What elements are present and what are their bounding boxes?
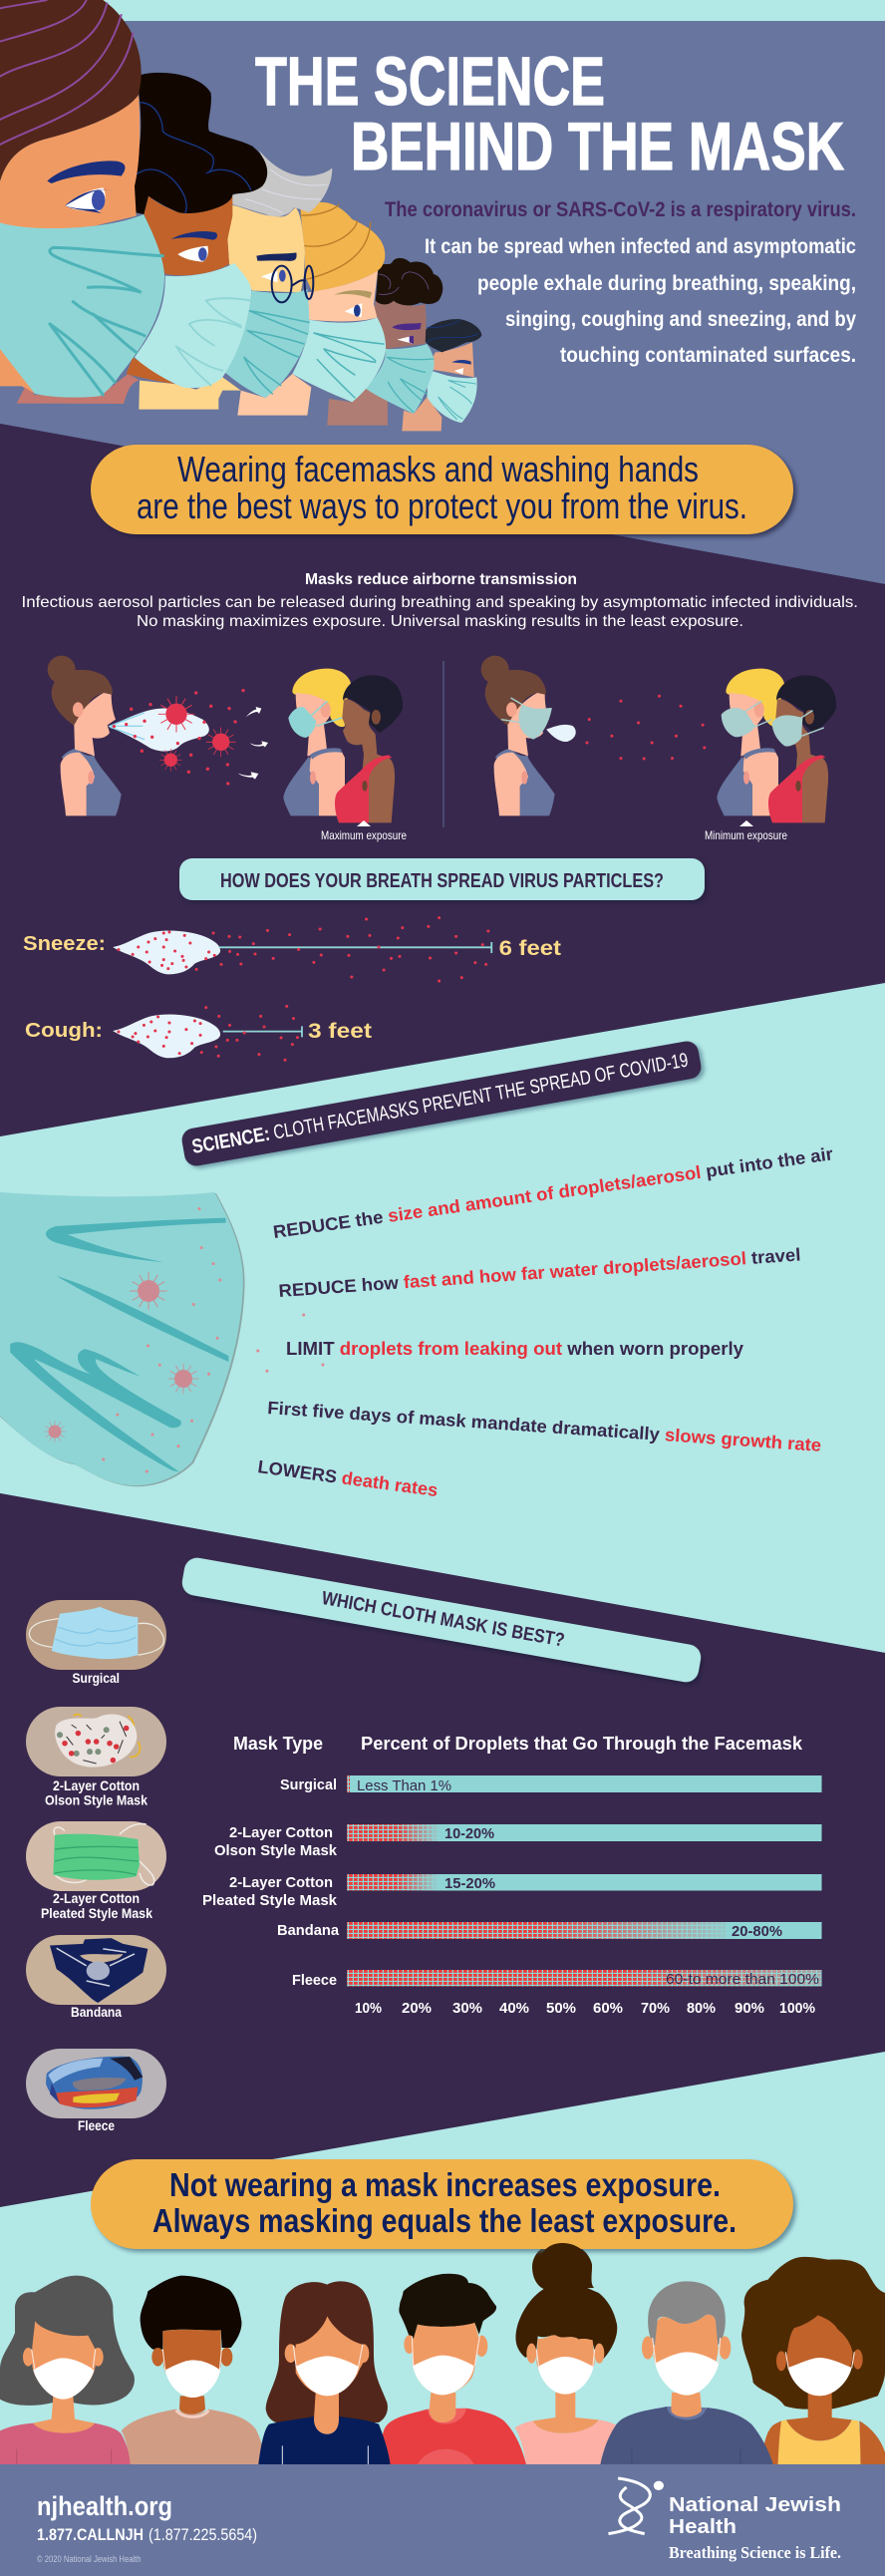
footer contact details: njhealth.org <box>37 2491 172 2521</box>
axis labels: 40% <box>499 2000 529 2017</box>
photo: fleece: Fleece <box>78 2117 115 2133</box>
person: hair bun, peach shirt <box>515 2241 617 2464</box>
person 1 <box>0 0 164 398</box>
heading: which cloth mask is best: WHICH CLOTH MASK IS BEST? <box>320 1588 566 1652</box>
bar chart: droplets through facemask <box>202 1775 821 2017</box>
chart: cough spread: 3 feet <box>308 1020 372 1043</box>
row: fleece: 60-to more than 100% <box>666 1971 819 1988</box>
photo: olson style mask: 2-Layer Cotton <box>53 1777 140 1793</box>
reduce size and amount: REDUCE the size and amount of droplets/aerosol put into the air <box>272 1143 834 1242</box>
title <box>255 43 844 184</box>
footer contact details <box>37 2491 257 2564</box>
heading: science cloth facemasks prevent the spread <box>180 1040 703 1167</box>
masks <box>518 705 802 747</box>
illustration: large mask close-up <box>0 1192 323 1486</box>
divider between scenes <box>442 661 444 827</box>
panel: dark section on which mask is best <box>0 1493 885 2207</box>
person 3 <box>222 151 332 398</box>
person 6 <box>422 319 481 423</box>
row: pleated <box>202 1874 821 1909</box>
callout: wearing facemasks pill: Wearing facemasks and washing hands <box>177 449 699 489</box>
mask viruses <box>44 1272 198 1443</box>
person: long brown hair, navy shirt <box>258 2281 391 2464</box>
photo: pleated style mask: Pleated Style Mask <box>41 1905 152 1921</box>
chart: cough spread <box>25 1006 372 1060</box>
panel: teal section on cloth facemask science <box>0 983 885 1653</box>
limit droplets: LIMIT droplets from leaking out when worn properly <box>286 1339 743 1359</box>
label: maximum exposure: Maximum exposure <box>321 828 407 842</box>
photo: pleated style mask: 2-Layer Cotton <box>53 1890 140 1906</box>
first five days: First five days of mask mandate dramatically slows growth rate <box>267 1398 822 1455</box>
photo: olson style mask <box>26 1707 166 1808</box>
photo: surgical mask: Surgical <box>72 1670 120 1686</box>
label: maximum exposure <box>321 820 407 842</box>
row: fleece <box>292 1970 821 1989</box>
logo: National Jewish Health: Health <box>669 2516 737 2538</box>
callout: wearing facemasks pill: are the best ways to protect you from the virus. <box>137 485 747 526</box>
photo: surgical mask <box>26 1600 166 1686</box>
callout: not wearing a mask pill <box>91 2159 793 2249</box>
logo: National Jewish Health: Breathing Science is Life. <box>669 2543 841 2562</box>
callout: wearing facemasks pill <box>91 445 793 534</box>
person: grey-haired man, blue sweater <box>600 2281 773 2464</box>
row: pleated: 2-Layer Cotton <box>229 1874 333 1891</box>
necks and shoulders <box>0 346 442 431</box>
illustration: minimum exposure scene, everyone masked <box>481 656 836 822</box>
virus particles <box>158 696 235 772</box>
text block: masks reduce airborne transmission: No masking maximizes exposure. Universal masking results in the least exposure. <box>137 613 743 630</box>
axis labels <box>355 2000 815 2017</box>
illustration: maximum exposure scene, no masks <box>48 656 403 822</box>
panel: dark section with exposure and breath content <box>0 424 885 1136</box>
lowers death rates: LOWERS death rates <box>256 1456 440 1500</box>
text block: masks reduce airborne transmission: Infectious aerosol particles can be released during breathing and speaking by asymptomatic infected individuals. <box>22 594 858 611</box>
row: bandana <box>277 1922 821 1940</box>
row: surgical <box>280 1775 821 1794</box>
row: surgical: Less Than 1% <box>357 1777 451 1794</box>
footer contact details: 1.877.CALLNJH <box>37 2525 144 2544</box>
list: ways cloth facemasks help <box>256 1143 834 1500</box>
heading: how does your breath spread virus particles: HOW DOES YOUR BREATH SPREAD VIRUS PARTICLES? <box>220 870 664 892</box>
glasses <box>272 266 313 302</box>
person: curly brown hair, yellow top <box>741 2257 885 2464</box>
photo: olson style mask: Olson Style Mask <box>45 1792 148 1808</box>
person: black afro, tan shirt <box>122 2276 264 2464</box>
intro text block: touching contaminated surfaces. <box>560 344 856 367</box>
chart: cough spread: Cough: <box>25 1020 103 1042</box>
title: THE SCIENCE <box>255 43 605 120</box>
breath cloud <box>108 709 209 752</box>
heading: science cloth facemasks prevent the spread: SCIENCE: <box>190 1124 272 1158</box>
photo: fleece <box>26 2049 166 2133</box>
person: red shirt, dark hair <box>383 2274 526 2499</box>
axis labels: 50% <box>546 2000 576 2017</box>
label: minimum exposure: Minimum exposure <box>705 828 787 842</box>
reduce how fast: REDUCE how fast and how far water droplets/aerosol travel <box>278 1244 801 1301</box>
person 4 <box>292 202 386 402</box>
panel: hero slate background <box>0 21 885 584</box>
illustration: row of masked profile faces <box>0 0 481 431</box>
chart: sneeze spread: 6 feet <box>499 937 561 960</box>
intro text block: people exhale during breathing, speaking, <box>477 272 856 295</box>
row: olson <box>214 1824 821 1859</box>
row: olson: 10-20% <box>444 1825 494 1842</box>
footer contact details: (1.877.225.5654) <box>148 2525 257 2544</box>
panel: top teal band <box>0 0 885 21</box>
row: surgical: Surgical <box>280 1776 337 1793</box>
table header: mask type and percent of droplets: Mask Type <box>233 1734 323 1754</box>
photo: bandana <box>26 1935 166 2020</box>
row: bandana: 20-80% <box>732 1923 782 1940</box>
axis labels: 100% <box>779 2000 815 2017</box>
text block: masks reduce airborne transmission: Masks reduce airborne transmission <box>305 571 577 588</box>
axis labels: 60% <box>593 2000 623 2017</box>
person 2 <box>133 73 267 388</box>
heading: how does your breath spread virus particles <box>179 858 705 900</box>
callout: not wearing a mask pill: Not wearing a mask increases exposure. <box>169 2166 721 2203</box>
photo: pleated style mask <box>26 1821 166 1921</box>
logo mark <box>608 2478 664 2534</box>
axis labels: 10% <box>355 2000 382 2017</box>
arrows <box>238 707 268 780</box>
footer contact details: © 2020 National Jewish Health <box>37 2554 142 2564</box>
chart: sneeze spread <box>23 918 561 981</box>
row: bandana: Bandana <box>277 1922 340 1939</box>
person 5 <box>365 258 442 414</box>
mask on exposed person <box>311 701 342 726</box>
photo: bandana: Bandana <box>71 2004 122 2020</box>
logo: National Jewish Health <box>608 2478 841 2562</box>
aerosol dots <box>114 691 243 784</box>
axis labels: 20% <box>402 2000 432 2017</box>
panel: footer <box>0 2464 885 2576</box>
aerosol dots <box>587 696 705 759</box>
intro text block <box>385 198 856 367</box>
chart: sneeze spread: Sneeze: <box>23 933 106 955</box>
axis labels: 70% <box>641 2000 670 2017</box>
row: olson: 2-Layer Cotton <box>229 1824 333 1841</box>
panel: teal closing section <box>0 2052 885 2464</box>
axis labels: 90% <box>735 2000 764 2017</box>
heading: science cloth facemasks prevent the spread: CLOTH FACEMASKS PREVENT THE SPREAD OF COVID-19 <box>272 1050 690 1144</box>
person: hair bun overlapping pill <box>538 2243 594 2289</box>
axis labels: 30% <box>452 2000 482 2017</box>
callout: not wearing a mask pill: Always masking equals the least exposure. <box>152 2202 737 2239</box>
row: pleated: 15-20% <box>444 1875 495 1892</box>
logo: National Jewish Health: National Jewish <box>669 2494 841 2516</box>
heading: which cloth mask is best <box>180 1556 703 1684</box>
person: grey hair, pink shirt <box>0 2276 135 2464</box>
table header: mask type and percent of droplets: Percent of Droplets that Go Through the Facemask <box>361 1734 803 1754</box>
row: pleated: Pleated Style Mask <box>202 1892 338 1909</box>
small breath cloud <box>546 725 576 742</box>
label: minimum exposure <box>705 820 787 842</box>
axis labels: 80% <box>687 2000 716 2017</box>
row: olson: Olson Style Mask <box>214 1842 338 1859</box>
text block: masks reduce airborne transmission <box>22 571 858 630</box>
row: fleece: Fleece <box>292 1972 337 1989</box>
